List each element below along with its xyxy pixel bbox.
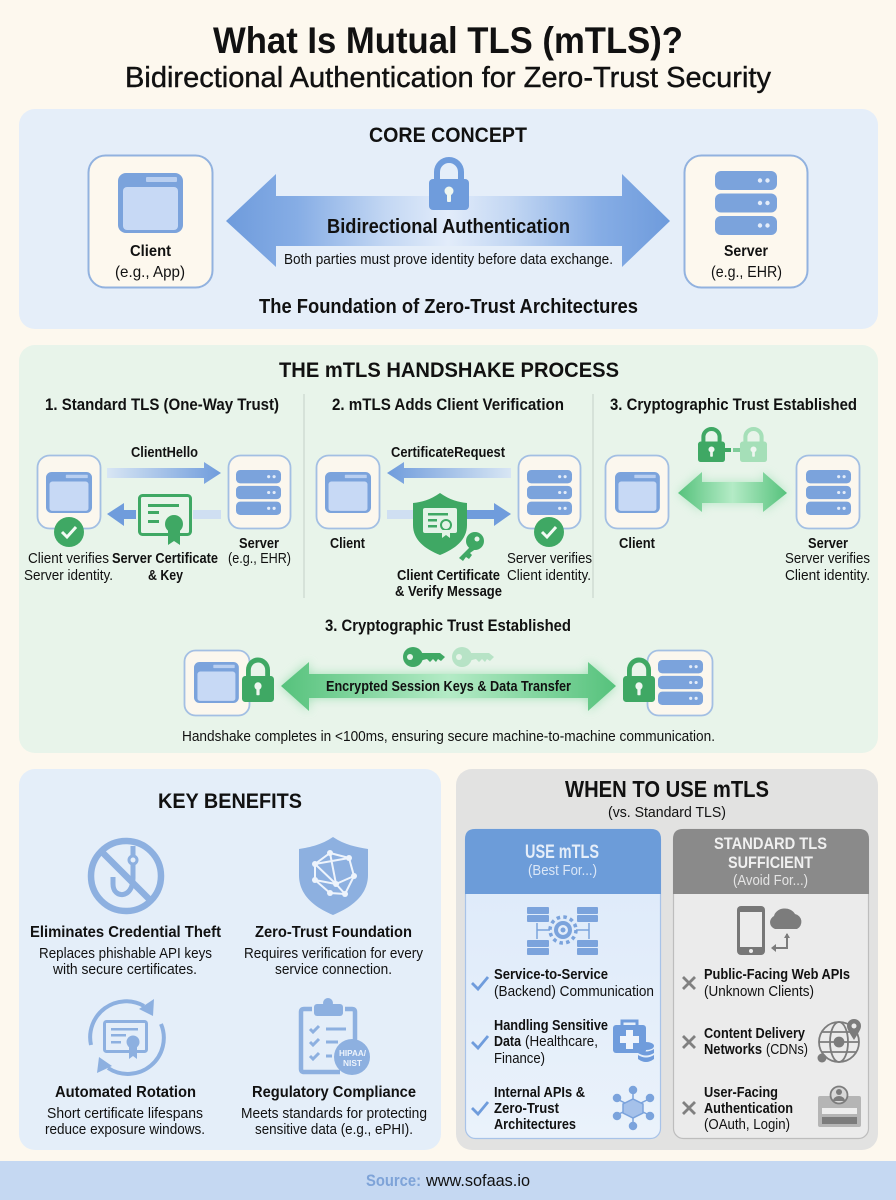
icon: login card bbox=[818, 1086, 861, 1127]
arrow: server certificate return bbox=[107, 503, 221, 526]
certificaterequest label: CertificateRequest bbox=[391, 445, 505, 461]
benefit: zero trust foundation bbox=[244, 837, 424, 978]
arrow: clienthello bbox=[107, 462, 221, 484]
source url: www.sofaas.io bbox=[425, 1172, 530, 1190]
step 1: standard TLS bbox=[24, 396, 291, 584]
server box bbox=[796, 456, 860, 528]
panel: core concept bbox=[19, 109, 878, 329]
source label: Source: bbox=[366, 1172, 421, 1190]
clienthello label: ClientHello bbox=[131, 445, 198, 461]
card header: USE mTLS bbox=[525, 842, 599, 863]
step 2: mTLS adds client verification: 2. mTLS Adds Client Verification bbox=[332, 396, 564, 414]
title: Bidirectional Authentication for Zero-Trust Security bbox=[125, 62, 771, 94]
item: sensitive data: Data bbox=[494, 1034, 522, 1050]
item: CDNs bbox=[683, 1026, 808, 1058]
footer bbox=[0, 1161, 896, 1200]
text: server verifies: Server verifies bbox=[785, 551, 870, 567]
caption: handshake time: Handshake completes in <100ms, ensuring secure machine-to-machine communication. bbox=[182, 728, 715, 745]
heading: when to use: (vs. Standard TLS) bbox=[608, 804, 726, 821]
icon: clipboard compliance: HIPAA/ bbox=[339, 1049, 367, 1058]
text: Requires verification for every bbox=[244, 946, 424, 962]
text: Regulatory Compliance bbox=[252, 1084, 416, 1101]
server with lock bbox=[623, 650, 712, 716]
label: bidirectional authentication: Bidirectional Authentication bbox=[327, 216, 570, 238]
item: service to service: (Backend) Communication bbox=[494, 984, 654, 1000]
item: sensitive data bbox=[472, 1018, 608, 1067]
client node: Client bbox=[130, 243, 172, 260]
server node: (e.g., EHR) bbox=[711, 264, 782, 281]
item: service to service: Service-to-Service bbox=[494, 967, 608, 983]
text: server verifies: Client identity. bbox=[507, 568, 591, 584]
heading: core concept: CORE CONCEPT bbox=[369, 123, 527, 147]
text: client: Client bbox=[330, 536, 365, 552]
heading: when to use: WHEN TO USE mTLS bbox=[565, 776, 769, 802]
panel: key benefits bbox=[19, 769, 441, 1150]
text: server verifies bbox=[785, 536, 870, 584]
item: public-facing: (Unknown Clients) bbox=[704, 984, 814, 1000]
panel: when to use mTLS bbox=[456, 769, 878, 1150]
card header: SUFFICIENT bbox=[728, 853, 814, 872]
item: public-facing bbox=[683, 967, 850, 1000]
caption: both parties: Both parties must prove identity before data exchange. bbox=[284, 251, 613, 268]
text: server certificate and key bbox=[112, 551, 218, 584]
icon: shield with certificate bbox=[413, 493, 467, 555]
arrow: certificaterequest bbox=[387, 462, 511, 484]
icon: phone and cloud bbox=[737, 906, 801, 955]
text: client certificate and verify bbox=[395, 568, 502, 600]
item: internal APIs: Zero-Trust bbox=[494, 1101, 559, 1117]
text bbox=[244, 924, 424, 978]
item: CDNs: Content Delivery bbox=[704, 1026, 805, 1042]
title: What Is Mutual TLS (mTLS)? bbox=[213, 20, 683, 61]
item: sensitive data: Handling Sensitive bbox=[494, 1018, 608, 1034]
text: client: Client bbox=[619, 536, 655, 552]
item: sensitive data: (Healthcare, bbox=[525, 1034, 598, 1050]
arrow: client certificate bbox=[387, 503, 511, 526]
item: internal APIs: Architectures bbox=[494, 1117, 576, 1133]
text: Meets standards for protecting bbox=[241, 1106, 427, 1122]
subheading: foundation: The Foundation of Zero-Trust Architectures bbox=[259, 295, 638, 318]
icon: check badge bbox=[534, 517, 564, 547]
benefit: credential theft bbox=[30, 841, 222, 978]
item: user-facing authentication: Authentication bbox=[704, 1101, 793, 1117]
text: service connection. bbox=[275, 962, 392, 978]
card header: STANDARD TLS bbox=[714, 834, 827, 853]
step 2: mTLS adds client verification bbox=[316, 396, 592, 600]
card header bbox=[465, 829, 661, 894]
text: server verifies: Server bbox=[808, 536, 848, 552]
text: client verifies: Client verifies bbox=[28, 551, 109, 567]
text: client certificate and verify: Client Certificate bbox=[397, 568, 500, 584]
arrow: encrypted data transfer bbox=[281, 662, 616, 711]
client node: (e.g., App) bbox=[115, 264, 185, 281]
server node: Server bbox=[724, 243, 768, 260]
heading: when to use bbox=[565, 776, 769, 821]
item: CDNs: Networks bbox=[704, 1042, 762, 1058]
text: Automated Rotation bbox=[55, 1084, 196, 1101]
step 3: cryptographic trust column: 3. Cryptographic Trust Established bbox=[610, 396, 857, 414]
item: internal APIs: Internal APIs & bbox=[494, 1085, 585, 1101]
item: user-facing authentication: (OAuth, Login) bbox=[704, 1117, 790, 1133]
icon: linked locks bbox=[698, 429, 767, 462]
icon: shield network bbox=[299, 837, 368, 915]
text: server ehr: (e.g., EHR) bbox=[228, 551, 291, 567]
title bbox=[125, 20, 771, 94]
text: server verifies: Client identity. bbox=[785, 568, 870, 584]
step 1: standard TLS: 1. Standard TLS (One-Way Trust) bbox=[45, 396, 279, 414]
item: user-facing authentication: User-Facing bbox=[704, 1085, 778, 1101]
text: with secure certificates. bbox=[52, 962, 197, 978]
icon: session keys bbox=[403, 647, 494, 667]
arrow: bidirectional bbox=[226, 174, 670, 267]
text: client verifies bbox=[24, 551, 113, 584]
benefit: automated rotation bbox=[45, 999, 205, 1138]
icon: key bbox=[459, 532, 484, 561]
item: user-facing authentication bbox=[683, 1085, 793, 1133]
item: service to service bbox=[472, 967, 654, 1000]
text: client certificate and verify: & Verify Message bbox=[395, 584, 502, 600]
server node bbox=[684, 156, 808, 288]
client box bbox=[316, 456, 380, 528]
step 3: cryptographic trust column bbox=[606, 396, 870, 584]
card header bbox=[673, 829, 869, 894]
item: sensitive data: Finance) bbox=[494, 1051, 545, 1067]
text: Short certificate lifespans bbox=[47, 1106, 203, 1122]
icon: medical kit and database bbox=[613, 1021, 654, 1062]
text: server ehr bbox=[228, 536, 291, 567]
panel: handshake process bbox=[19, 345, 878, 753]
item: CDNs: (CDNs) bbox=[766, 1042, 808, 1058]
text: Eliminates Credential Theft bbox=[30, 924, 222, 941]
client box bbox=[38, 456, 100, 528]
icon: hub bbox=[614, 1086, 654, 1130]
text: sensitive data (e.g., ePHI). bbox=[255, 1122, 413, 1138]
icon: service network bbox=[527, 907, 598, 955]
benefit: regulatory compliance bbox=[241, 998, 427, 1138]
text: server certificate and key: & Key bbox=[148, 568, 183, 584]
text: server verifies: Server verifies bbox=[507, 551, 592, 567]
server box bbox=[518, 456, 580, 528]
text bbox=[45, 1084, 205, 1138]
item: internal APIs bbox=[472, 1085, 585, 1133]
icon: certificate bbox=[140, 496, 190, 545]
text: reduce exposure windows. bbox=[45, 1122, 205, 1138]
label: encrypted session keys: Encrypted Session Keys & Data Transfer bbox=[326, 678, 571, 695]
text: client verifies: Server identity. bbox=[24, 568, 113, 584]
arrow: green bidirectional bbox=[678, 472, 787, 512]
icon: lock bbox=[429, 160, 469, 210]
heading: handshake: THE mTLS HANDSHAKE PROCESS bbox=[279, 358, 619, 382]
icon: clipboard compliance: NIST bbox=[343, 1059, 362, 1068]
card: standard TLS sufficient bbox=[673, 829, 869, 1138]
client with lock bbox=[184, 650, 274, 716]
card header: (Best For...) bbox=[528, 862, 597, 879]
session key transfer row: 3. Cryptographic Trust Established bbox=[325, 617, 571, 635]
text: server certificate and key: Server Certificate bbox=[112, 551, 218, 567]
icon: clipboard compliance bbox=[301, 998, 370, 1075]
text: Zero-Trust Foundation bbox=[255, 924, 412, 941]
heading: key benefits: KEY BENEFITS bbox=[158, 789, 302, 813]
icon: globe with pin bbox=[818, 1019, 861, 1062]
item: public-facing: Public-Facing Web APIs bbox=[704, 967, 850, 983]
text bbox=[241, 1084, 427, 1138]
text bbox=[30, 924, 222, 978]
icon: no phishing hook bbox=[91, 841, 161, 911]
client node bbox=[88, 156, 212, 288]
session key transfer row bbox=[182, 617, 715, 745]
text: server verifies bbox=[507, 551, 592, 584]
text: Replaces phishable API keys bbox=[39, 946, 212, 962]
client box bbox=[606, 456, 668, 528]
icon: check badge bbox=[54, 517, 84, 547]
server box bbox=[228, 456, 290, 528]
card header: (Avoid For...) bbox=[733, 872, 808, 889]
card: use mTLS bbox=[465, 829, 661, 1138]
text: server ehr: Server bbox=[239, 536, 279, 552]
icon: rotating certificate bbox=[90, 999, 164, 1074]
